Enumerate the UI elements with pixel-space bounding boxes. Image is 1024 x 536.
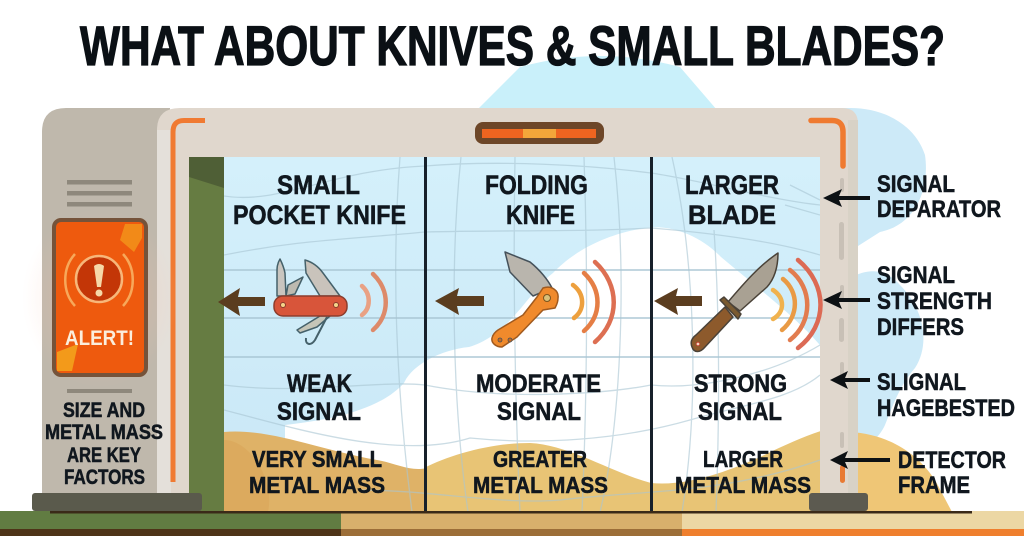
column 3 heading: LARGER — [685, 170, 779, 200]
icon: pocket knife — [274, 259, 347, 344]
metal mass label column 1: METAL MASS — [249, 472, 385, 498]
metal mass label column 3: LARGER — [703, 446, 783, 472]
column 2 heading — [485, 170, 588, 230]
cloud — [285, 227, 820, 484]
detector base right — [809, 493, 868, 511]
signal label column 3 — [694, 370, 787, 426]
panel: alert pillar — [22, 180, 178, 489]
callout: signal strength differs: DIFFERS — [877, 314, 964, 341]
callout: signal strength differs — [823, 262, 992, 341]
column 2 heading: FOLDING — [485, 170, 588, 200]
arrow: pocket knife to alarm — [218, 288, 265, 316]
column 3 heading: BLADE — [688, 200, 776, 230]
orange corner bracket right — [811, 120, 843, 166]
sand centre and right — [424, 430, 824, 512]
key factors text: ARE KEY — [67, 444, 141, 467]
column 2 heading: KNIFE — [506, 200, 575, 230]
key factors text — [45, 399, 163, 489]
detector frame — [42, 108, 858, 494]
signal label column 2 — [476, 370, 601, 426]
signal label column 3: STRONG — [694, 370, 787, 398]
alert screen: ALERT! — [65, 327, 134, 350]
window panel — [189, 157, 824, 512]
key factors text: FACTORS — [64, 466, 145, 489]
callout: signal strength differs: STRENGTH — [877, 288, 992, 315]
background sky shapes — [477, 56, 952, 512]
top indicator light — [475, 122, 604, 144]
callout: signal deparator: SIGNAL — [877, 171, 955, 198]
callout: signal deparator — [823, 171, 1001, 223]
icon: larger blade signal waves — [773, 260, 820, 348]
key factors text: METAL MASS — [45, 421, 163, 444]
detector base left — [32, 493, 202, 511]
ground strip — [0, 511, 1024, 536]
signal label column 1: SIGNAL — [277, 398, 361, 426]
key factors text: SIZE AND — [63, 399, 145, 422]
column 3 heading — [685, 170, 779, 230]
column 1 heading: SMALL — [277, 170, 360, 200]
icon: folding knife signal waves — [573, 262, 614, 342]
signal label column 1: WEAK — [287, 370, 352, 398]
metal mass label column 3: METAL MASS — [675, 472, 811, 498]
callout: detector frame — [830, 447, 1006, 499]
arrow: folding knife to alarm — [435, 288, 484, 315]
signal label column 3: SIGNAL — [698, 398, 782, 426]
callout: sligal hagebested — [830, 369, 1015, 422]
signal label column 1 — [277, 370, 361, 426]
icon: larger blade — [691, 253, 778, 352]
column 1 heading: POCKET KNIFE — [233, 200, 406, 230]
metal mass label column 2: GREATER — [493, 446, 587, 472]
dashed frame markings — [839, 178, 844, 448]
metal mass label column 2 — [473, 446, 608, 498]
column 1 heading — [233, 170, 406, 230]
callout: detector frame: FRAME — [898, 472, 970, 499]
column dividers — [424, 157, 427, 512]
arrow: larger blade to alarm — [654, 288, 702, 315]
icon: alert — [65, 254, 133, 306]
alert screen — [54, 220, 146, 375]
metal mass label column 3 — [675, 446, 811, 498]
signal grid lines — [224, 157, 820, 512]
vent lines — [67, 180, 132, 393]
metal mass label column 1: VERY SMALL — [252, 446, 382, 472]
icon: folding knife — [492, 252, 558, 347]
orange corner bracket left — [173, 120, 205, 482]
callout: signal strength differs: SIGNAL — [877, 262, 955, 289]
metal mass label column 2: METAL MASS — [473, 472, 608, 498]
signal label column 2: SIGNAL — [497, 398, 581, 426]
callout: signal deparator: DEPARATOR — [877, 196, 1001, 223]
sand left — [224, 432, 427, 512]
signal label column 2: MODERATE — [476, 370, 601, 398]
callout: sligal hagebested: SLIGNAL — [877, 369, 966, 396]
metal mass label column 1 — [249, 446, 385, 498]
icon: pocket knife signal waves — [362, 274, 386, 330]
